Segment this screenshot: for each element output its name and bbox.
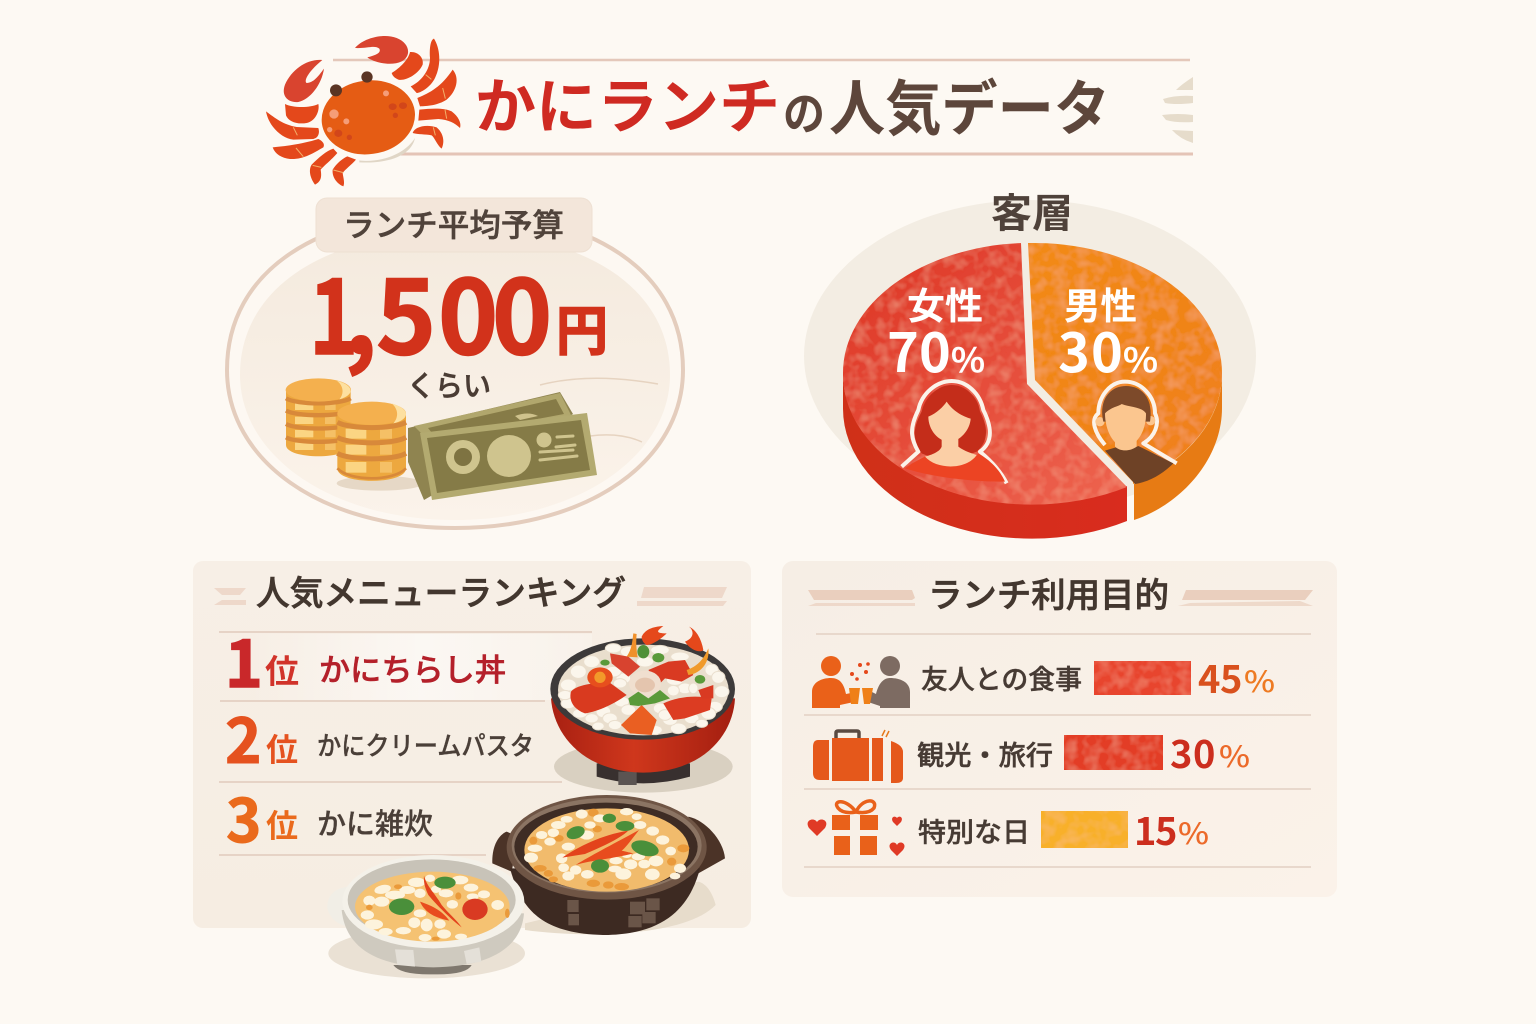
icon: woman <box>902 381 1007 483</box>
row: sightseeing <box>813 724 1250 783</box>
icon: crab <box>266 36 460 186</box>
illustration: white bowl <box>327 855 525 978</box>
value: 15 percent: % <box>1178 811 1209 853</box>
label: friends: 友人との食事 <box>921 658 1082 697</box>
budget amount: 1 <box>309 236 358 384</box>
title <box>475 59 1110 148</box>
ranking row lines <box>219 632 592 855</box>
label: sightseeing: 観光・旅行 <box>917 734 1053 773</box>
title: かにランチ <box>475 59 780 146</box>
icon: friends toasting <box>812 656 910 708</box>
budget oval <box>227 212 683 528</box>
label: male 30%: 30 <box>1058 309 1123 388</box>
value: 15 percent <box>1134 801 1209 856</box>
title band lines <box>333 60 1193 154</box>
label: special day: 特別な日 <box>918 811 1030 850</box>
rank 1: 位 <box>265 645 299 693</box>
icon: banknotes <box>408 392 597 500</box>
row: special day <box>808 801 1209 856</box>
bar: 15 percent <box>1041 811 1128 848</box>
ranking ribbons <box>214 587 727 606</box>
panel: customer demographics <box>804 181 1256 539</box>
value: 15 percent: 15 <box>1134 801 1177 856</box>
label: male 30% <box>1058 276 1158 388</box>
purpose background <box>782 561 1337 897</box>
title: の <box>783 78 825 144</box>
bar: 30 percent <box>1064 735 1163 770</box>
rank 1 highlight <box>250 634 592 700</box>
label: male 30%: % <box>1123 334 1158 382</box>
rank 1: 1 <box>225 614 263 706</box>
rank 3: 3 <box>226 773 261 860</box>
value: 30 percent <box>1170 724 1250 779</box>
label: female 70%: % <box>951 334 985 382</box>
ranking heading: 人気メニューランキング <box>256 566 626 615</box>
value: 30 percent: % <box>1219 734 1250 776</box>
rank 1: かにちらし丼 <box>319 645 506 690</box>
budget amount: 円 <box>556 287 608 366</box>
budget heading: ランチ平均予算 <box>343 200 564 246</box>
title: 人気データ <box>829 61 1110 148</box>
decorative title marks <box>1162 77 1193 143</box>
icon: coin stacks <box>286 378 423 491</box>
panel: lunch budget <box>227 198 683 528</box>
budget amount: ,500 <box>344 237 552 384</box>
value: 30 percent: 30 <box>1170 724 1215 779</box>
rank 2: 2 <box>225 691 262 781</box>
label: female 70%: 70 <box>887 309 951 388</box>
panel: lunch purpose <box>782 561 1337 897</box>
row: friends <box>812 649 1275 708</box>
budget amount <box>309 236 608 384</box>
icon: suitcase <box>813 730 903 783</box>
purpose ribbons <box>808 590 1313 606</box>
rank 2: かにクリームパスタ <box>317 726 534 763</box>
value: 45 percent: 45 <box>1198 649 1242 704</box>
icon: man <box>1094 382 1177 484</box>
ranking background <box>193 561 751 928</box>
value: 45 percent: % <box>1244 659 1275 701</box>
rank 3: かに雑炊 <box>317 801 433 843</box>
pie backdrop <box>804 200 1256 512</box>
illustration: crab chirashi bowl <box>550 626 735 793</box>
label: female 70%: 女性 <box>907 276 983 330</box>
heading: customer segment: 客層 <box>991 181 1073 239</box>
panel: popular menu ranking <box>193 561 751 978</box>
rank 1 <box>225 614 506 706</box>
label: male 30%: 男性 <box>1064 276 1137 330</box>
value: 45 percent <box>1198 649 1275 704</box>
purpose heading: ランチ利用目的 <box>928 568 1169 617</box>
icon: gift box and hearts <box>808 801 904 856</box>
bar: 45 percent <box>1094 661 1191 695</box>
budget heading <box>316 198 592 252</box>
purpose row lines <box>804 634 1311 867</box>
rank 2 <box>225 691 534 781</box>
illustration: clay pot zosui <box>492 795 725 935</box>
rank 3: 位 <box>266 801 298 847</box>
pie chart <box>843 243 1222 539</box>
label: female 70% <box>887 276 985 388</box>
rank 2: 位 <box>266 725 298 771</box>
budget note: くらい <box>407 363 491 405</box>
rank 3 <box>226 773 433 860</box>
